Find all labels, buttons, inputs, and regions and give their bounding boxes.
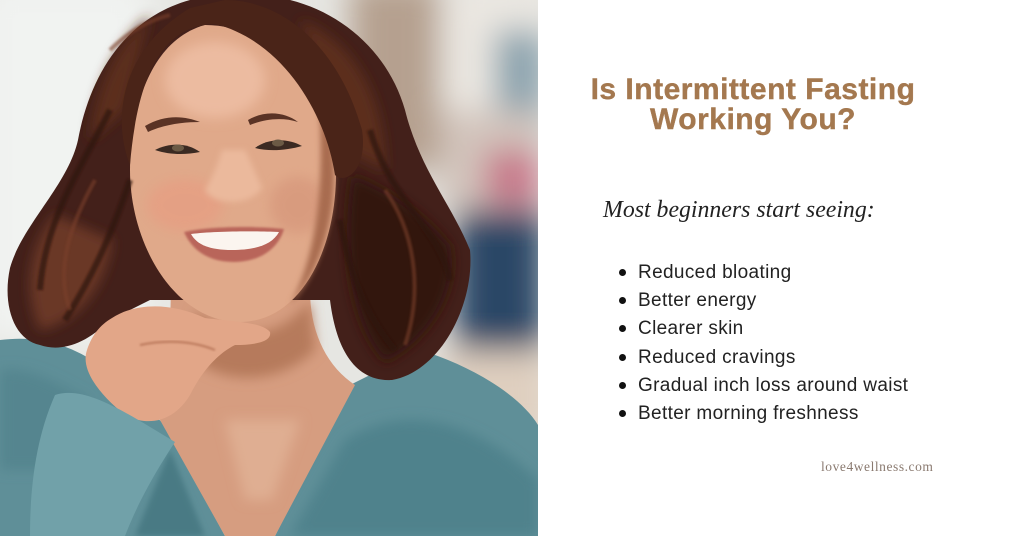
hair: [8, 0, 470, 380]
nose: [205, 150, 262, 202]
forearm sleeve: [30, 393, 175, 536]
subheading: Most beginners start seeing:: [603, 197, 875, 223]
face: [130, 25, 336, 322]
neck and chest: [158, 290, 355, 536]
blurred background: [0, 0, 538, 425]
title: Working You?: [650, 103, 856, 136]
hair front parting: [122, 26, 363, 178]
benefits list: Better energy: [638, 290, 757, 311]
hand: [86, 306, 270, 421]
front curls: [36, 108, 452, 322]
benefits list: Better morning freshness: [638, 403, 859, 424]
benefits list: Reduced cravings: [638, 347, 796, 368]
photo: smiling woman: [0, 0, 538, 536]
smile: [184, 227, 284, 262]
benefits list: Reduced bloating: [638, 262, 792, 283]
benefits list: Gradual inch loss around waist: [638, 375, 908, 396]
title: [591, 73, 915, 136]
benefits list: Clearer skin: [638, 318, 744, 339]
sweater: [0, 339, 538, 536]
title: Is Intermittent Fasting: [591, 73, 915, 106]
website credit: love4wellness.com: [821, 459, 933, 474]
benefits list: [619, 262, 908, 424]
eyes and brows: [145, 113, 302, 154]
